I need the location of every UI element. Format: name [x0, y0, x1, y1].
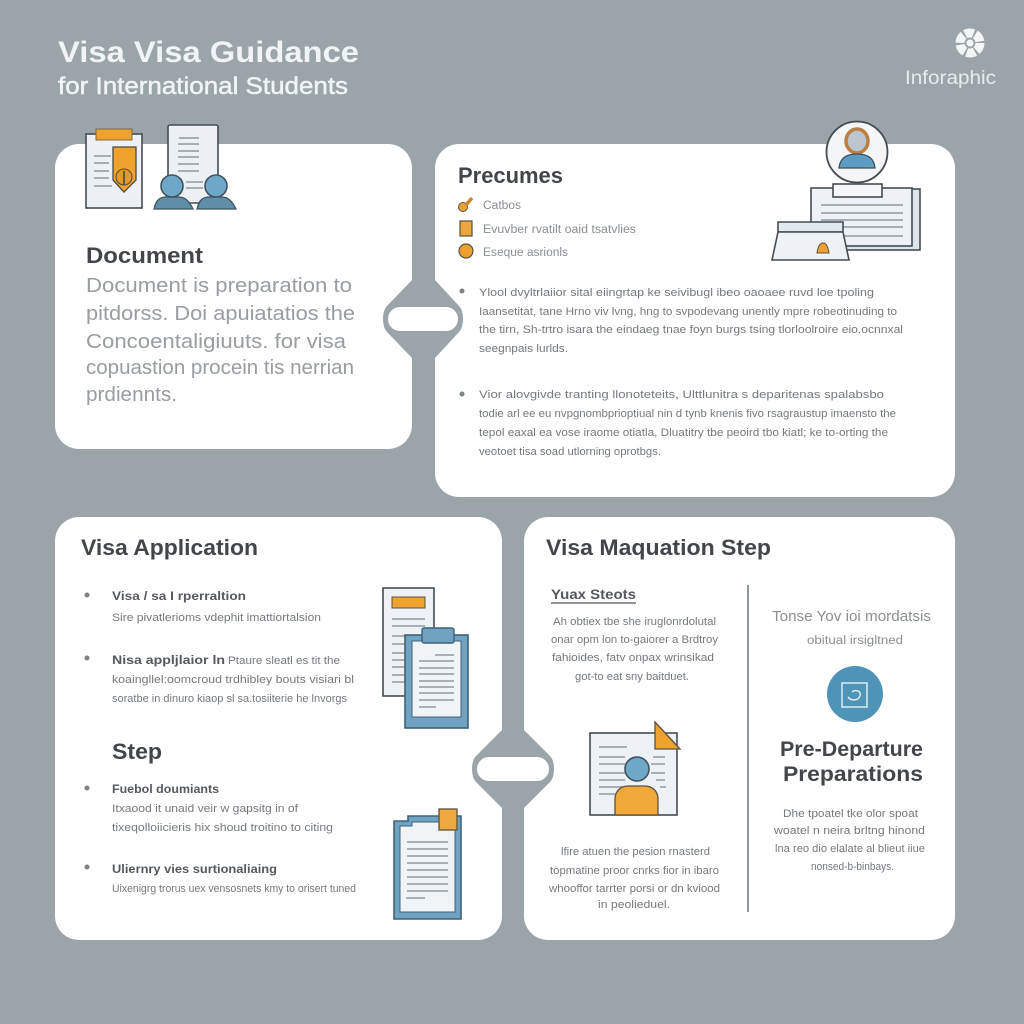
text: document body: pitdorss. Doi apuiatatios the [86, 303, 355, 325]
logo [905, 33, 996, 89]
list item: preparation: Sire pivatlerioms vdephit imattiortalsion [112, 612, 321, 624]
checklist: Eseque asrionls [483, 247, 568, 259]
bullet paragraph 2: tepol eaxal ea vose iraome otiatla, Dluatitry tbe peoird tbo kiatl; ke to-orting the [479, 427, 888, 439]
text: steps intro [551, 616, 719, 683]
text: document body: Concoentaligiuuts. for visa [86, 331, 347, 353]
icon: profile document [590, 722, 680, 815]
bullet paragraph 1: Ylool dvyltrlaiior sital eiingrtap ke seivibugl ibeo oaoaee ruvd loe tpoling [479, 287, 874, 299]
bullet paragraph 2: Vior alovgivde tranting llonoteteits, Ulttlunitra s deparitenas spalabsbo [479, 389, 884, 401]
panel: visa application [55, 517, 502, 940]
title: Visa Visa Guidance [58, 36, 359, 69]
checklist: Catbos [483, 200, 521, 212]
connector: bottom panels [472, 730, 554, 808]
checklist [458, 198, 636, 259]
panel: document [55, 125, 412, 449]
logo: Inforaphic [905, 68, 996, 89]
text: steps intro: Ah obtiex tbe she iruglonrdolutal [553, 616, 716, 628]
text: right column intro [772, 608, 931, 647]
list item: itinerary: Uliernry vies surtionaliaing [112, 862, 277, 876]
title [58, 36, 359, 100]
text: steps intro: got-to eat sny baitduet. [575, 671, 689, 683]
list item: documents: tixeqolloiicieris hix shoud troitino to citing [112, 822, 333, 834]
checklist: Evuvber rvatilt oaid tsatvlies [483, 224, 636, 236]
bullet paragraph 2: veotoet tisa soad utlorning oprotbgs. [479, 446, 661, 458]
icon: teal circle [827, 666, 883, 722]
title: for International Students [58, 73, 348, 100]
bullet paragraph 1: the tirn, Sh-trtro isara the eindaeg tnae foyn burgs tsing tlorloolroire eio.ocnnxal [479, 324, 903, 336]
text: pre-departure body [773, 808, 925, 873]
heading: precumes: Precumes [458, 163, 563, 188]
icon: clipboard with pen [86, 129, 142, 208]
heading: pre-departure preparations: Pre-Departure [780, 738, 923, 761]
heading: visa application: Visa Application [81, 535, 258, 560]
text: pre-departure body: woatel n neira brltng hinond [773, 825, 925, 837]
text: pre-departure body: lna reo dio elalate al blieut iiue [775, 843, 925, 855]
text: steps detail: in peolieduel. [598, 899, 670, 911]
subheading: yuax steots: Yuax Steots [551, 586, 636, 602]
text: right column intro: obitual irsigltned [807, 635, 903, 647]
text: steps detail: topmatine proor cnrks fior in ibaro [550, 865, 719, 877]
list item: itinerary [84, 862, 356, 895]
text: steps detail [548, 846, 720, 911]
text: steps intro: onar opm lon to-gaiorer a Brdtroy [551, 634, 719, 646]
bullet paragraph 2 [460, 389, 896, 458]
text: document body: Document is preparation to [86, 275, 352, 297]
connector: top panels [383, 280, 463, 358]
icon: document with two people [154, 125, 236, 209]
panel: precumes [435, 122, 955, 497]
text: pre-departure body: Dhe tpoatel tke olor spoat [783, 808, 918, 820]
list item: preparation: Visa / sa I rperraltion [112, 589, 246, 603]
list item: application: koaingllel:oomcroud trdhibley bouts visiari bl [112, 674, 354, 686]
text: pre-departure body: nonsed-b-binbays. [811, 861, 894, 873]
heading: pre-departure preparations [780, 738, 923, 786]
text: steps intro: fahioides, fatv onpax wrinsikad [552, 652, 714, 664]
text: document body: copuastion procein tis nerrian [86, 357, 354, 379]
list item: application: soratbe in dinuro kiaop sl sa.tosiiterie he lnvorgs [112, 693, 347, 705]
bullet paragraph 1 [460, 287, 903, 355]
bullet paragraph 1: seegnpais lurlds. [479, 343, 568, 355]
text: steps detail: whooffor tarrter porsi or dn kviood [548, 883, 720, 895]
list item: application [84, 653, 354, 705]
bullet paragraph 2: todie arl ee eu nvpgnombprioptiual nin d tynb knenis fivo rsagraustup imaensto the [479, 408, 896, 420]
heading: document: Document [86, 243, 204, 268]
list item: application: Ptaure sleatl es tit the [228, 655, 340, 667]
list item: preparation [84, 589, 321, 624]
icon: documents and person badge [772, 122, 920, 260]
text: steps detail: lfire atuen the pesion rnasterd [561, 846, 710, 858]
list item: itinerary: Uixenigrg trorus uex vensosnets kmy to orisert tuned [112, 883, 356, 895]
icon: clipboard [394, 809, 461, 919]
panel: visa maquation step [524, 517, 955, 940]
list item: application: Nisa appljlaior ln [112, 653, 225, 667]
bullet paragraph 1: Iaansetitat, tane Hrno viv lvng, hng to svpodevang unently mpre robeotinuding to [479, 306, 897, 318]
text: right column intro: Tonse Yov ioi mordatsis [772, 608, 931, 625]
heading: pre-departure preparations: Preparations [783, 763, 923, 786]
list item: documents: Fuebol doumiants [112, 782, 219, 796]
list item: documents: Itxaood it unaid veir w gapsitg in of [112, 803, 299, 815]
heading: visa maquation step: Visa Maquation Step [546, 535, 771, 560]
text: document body [86, 275, 355, 406]
heading: step: Step [112, 739, 162, 764]
icon: overlapping documents [383, 588, 468, 728]
text: document body: prdiennts. [86, 384, 177, 406]
list item: documents [84, 782, 333, 834]
